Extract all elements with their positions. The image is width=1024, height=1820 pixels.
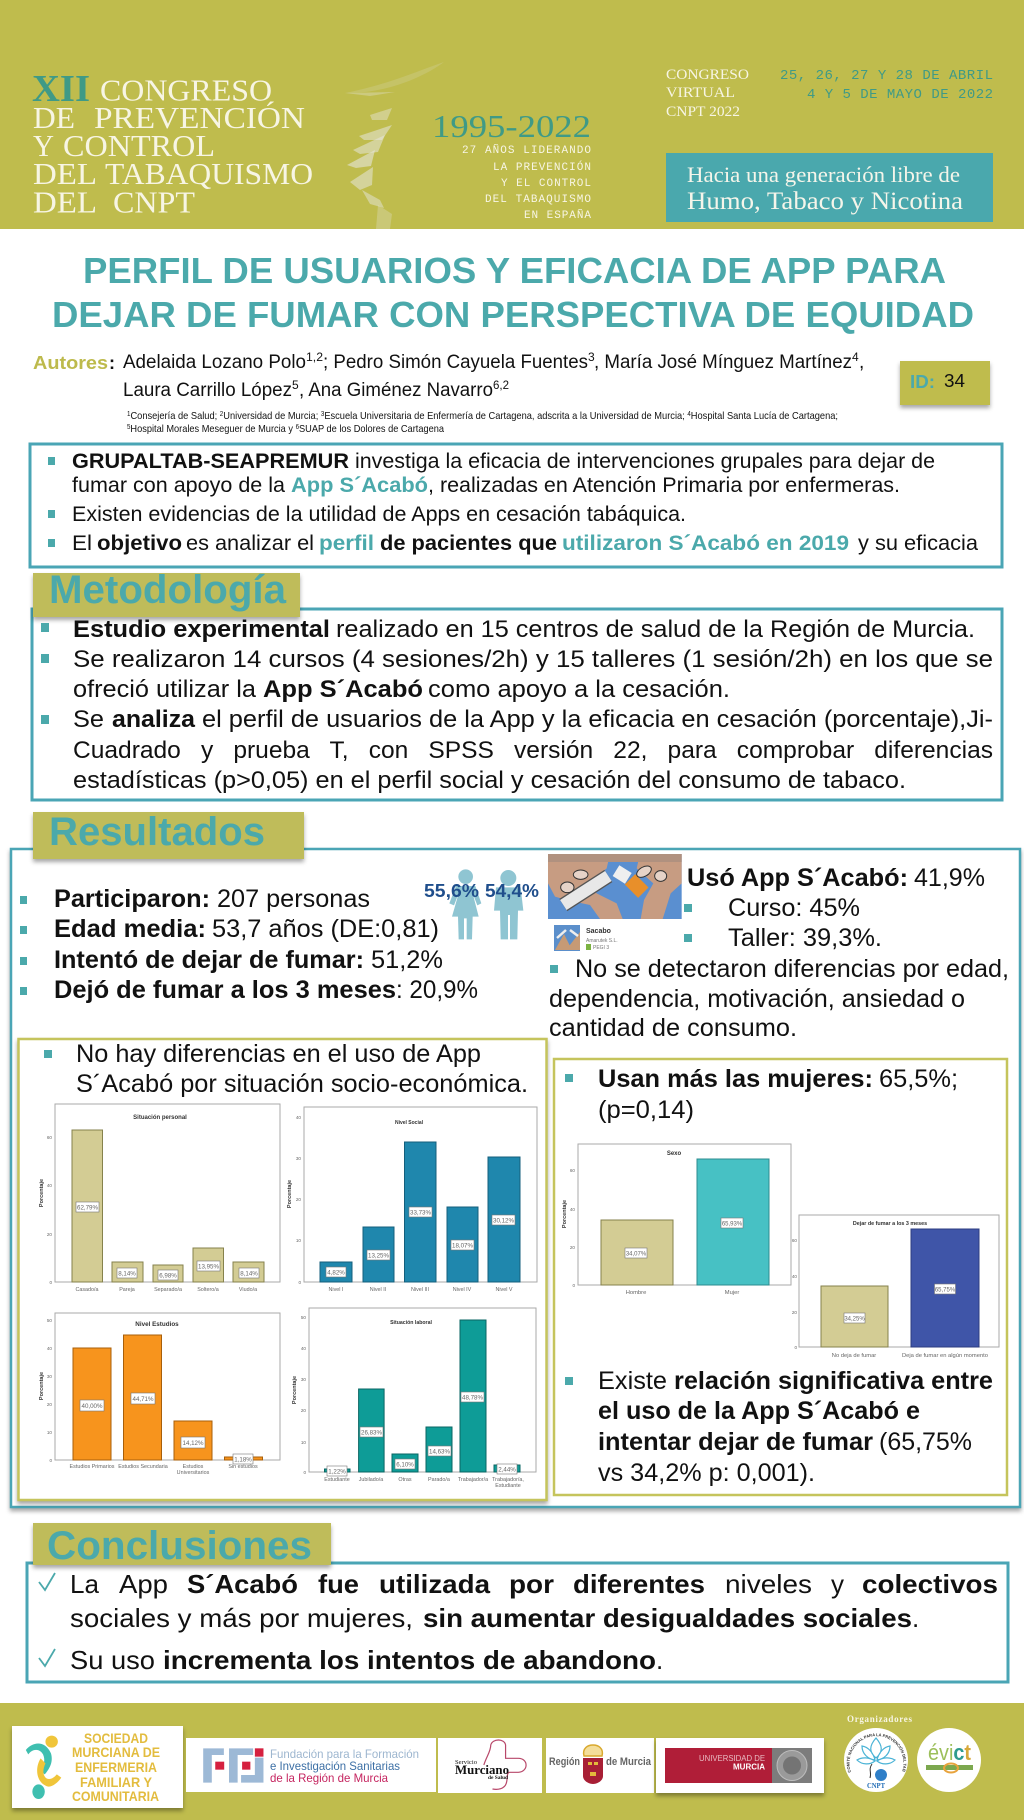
panel: introduction: Existen evidencias de la utilidad de Apps en cesación tabáquica.	[72, 503, 686, 526]
congress title: DEL	[33, 156, 97, 191]
values: situación personal: 62,79%	[77, 1204, 98, 1211]
values: situación laboral: 48,78%	[462, 1394, 483, 1401]
values: situación laboral: 2,44%	[498, 1466, 516, 1473]
affiliations: Hospital Morales Meseguer de Murcia y	[130, 423, 296, 435]
authors: Adelaida Lozano Polo	[123, 352, 306, 373]
chart: situación personal: Separado/a	[154, 1287, 182, 1293]
logo: CNPT: CNPT	[867, 1782, 885, 1790]
chart: situación personal: 60	[47, 1135, 52, 1140]
congress title: Y	[33, 128, 54, 163]
values: nivel social	[326, 1207, 515, 1277]
virtual congress label: CNPT 2022	[666, 104, 740, 120]
congress title: CONTROL	[63, 128, 215, 163]
values: nivel estudios: 44,71%	[132, 1396, 154, 1403]
heading: metodología: Metodología	[49, 568, 287, 612]
conclusion 2: .	[656, 1645, 663, 1675]
chart: nivel estudios: Estudios	[183, 1464, 204, 1470]
icon: woman and man with percentages: 54,4%	[485, 881, 539, 901]
methodology text: analiza	[112, 706, 196, 733]
conclusion 1: colectivos	[862, 1569, 998, 1599]
key results list: Dejó de fumar a los 3 meses	[54, 976, 396, 1004]
chart: dejar de fumar a los 3 meses: Dejar de fumar a los 3 meses	[853, 1221, 927, 1227]
chart: nivel estudios: 50	[47, 1318, 52, 1323]
conclusion 1: App	[119, 1569, 168, 1599]
app store listing: Sacabo	[586, 928, 611, 935]
icon: smoke	[345, 62, 444, 229]
app store listing: Amarutek S.L.	[586, 938, 618, 944]
values: nivel social: 18,07%	[452, 1242, 473, 1249]
chart: dejar de fumar a los 3 meses: 20	[792, 1310, 797, 1315]
chart: sexo: 0	[572, 1283, 575, 1288]
methodology text: realizado en 15 centros de salud de la Región de Murcia.	[336, 616, 975, 643]
panel: metodología	[32, 568, 1002, 800]
methodology text: Se realizaron 14 cursos (4 sesiones/2h) y 15 talleres (1 sesión/2h) en los que se	[73, 646, 993, 673]
congress title: CNPT	[113, 184, 195, 220]
affiliations	[127, 410, 838, 435]
slogan box: Hacia una generación libre de	[687, 162, 960, 187]
conclusion 1	[70, 1569, 998, 1633]
logo: región de murcia	[546, 1738, 654, 1793]
values: nivel social: 33,73%	[410, 1209, 431, 1216]
affiliations: SUAP de los Dolores de Cartagena	[299, 423, 444, 435]
chart: situación personal: Viudo/a	[239, 1287, 257, 1293]
socio-economic statement: S´Acabó por situación socio-económica.	[76, 1070, 528, 1098]
logo: sociedad murciana: SOCIEDAD	[84, 1730, 148, 1746]
anniversary text: LA PREVENCIÓN	[493, 160, 591, 174]
panel: introduction: App S´Acabó	[291, 474, 428, 497]
chart: situación laboral: Otras	[398, 1477, 412, 1483]
authors: 1,2	[306, 350, 323, 364]
socio-economic statement	[44, 1040, 528, 1098]
bars: sexo	[601, 1159, 769, 1285]
chart: sexo: Porcentaje	[562, 1200, 568, 1228]
app store listing	[554, 925, 618, 951]
values: situación laboral: 1,22%	[328, 1468, 346, 1475]
key results list: Participaron:	[54, 885, 210, 913]
title	[52, 250, 974, 335]
chart: nivel estudios: Nivel Estudios	[135, 1321, 179, 1328]
chart: nivel social	[287, 1107, 537, 1293]
chart: sexo: 60	[570, 1168, 575, 1173]
chart: situación laboral: 40	[301, 1346, 306, 1351]
chart: nivel estudios: 10	[47, 1430, 52, 1435]
anniversary text	[432, 108, 591, 222]
dates: 25, 26, 27 Y 28 DE ABRIL	[780, 68, 993, 84]
methodology text: Cuadrado y prueba T, con SPSS versión 22, para comprobar diferencias	[73, 737, 993, 764]
congress title: CONGRESO	[100, 72, 272, 108]
socio-economic statement: No hay diferencias en el uso de App	[76, 1040, 481, 1068]
chart: dejar de fumar a los 3 meses: 40	[792, 1274, 797, 1279]
values: nivel estudios: 14,12%	[182, 1440, 204, 1447]
virtual congress label	[666, 67, 749, 120]
panel: introduction: perfil	[319, 532, 374, 555]
chart: nivel social: 40	[296, 1115, 301, 1120]
panel: introduction: fumar con apoyo de la	[72, 474, 285, 497]
logo: FFIS: Fundación para la Formación	[270, 1747, 419, 1761]
affiliations: Consejería de Salud;	[130, 410, 220, 422]
values: sexo	[625, 1218, 743, 1258]
chart: situación personal: Casado/a	[75, 1287, 99, 1293]
significant relation statement: el uso de la App S´Acabó e	[598, 1397, 920, 1425]
chart: nivel social: 20	[296, 1197, 301, 1202]
chart: situación laboral: Estudiante	[495, 1483, 521, 1489]
authors: 5	[292, 378, 299, 392]
values: dejar de fumar	[844, 1284, 956, 1323]
panel: introduction: de pacientes que	[380, 532, 557, 555]
values: nivel estudios: 40,00%	[82, 1403, 103, 1410]
chart: sexo	[562, 1144, 791, 1296]
title: PERFIL DE USUARIOS Y EFICACIA DE APP PARA	[83, 250, 946, 291]
authors: Autores	[33, 353, 108, 373]
app use results: cantidad de consumo.	[549, 1014, 797, 1042]
chart: situación personal: 20	[47, 1232, 52, 1237]
chart: dejar de fumar a los 3 meses: Deja de fumar en algún momento	[902, 1353, 988, 1359]
conclusion 1: utilizada	[379, 1569, 491, 1599]
chart: nivel social: Nivel III	[411, 1287, 429, 1293]
conclusion 1: sin aumentar desigualdades sociales	[423, 1603, 912, 1633]
logo: evict	[917, 1728, 981, 1792]
chart: nivel estudios: Estudios Primarios	[70, 1464, 115, 1470]
logo: sociedad murciana: FAMILIAR Y	[80, 1774, 153, 1790]
panel: introduction: utilizaron S´Acabó en 2019	[562, 532, 849, 555]
chart: nivel social: Nivel I	[329, 1287, 343, 1293]
authors	[33, 350, 864, 401]
chart: nivel estudios: 0	[49, 1458, 52, 1463]
key results list: Intentó de dejar de fumar:	[54, 946, 364, 974]
logo: sociedad murciana: ENFERMERIA	[75, 1759, 157, 1775]
chart: dejar de fumar a los 3 meses	[792, 1215, 999, 1359]
conclusion 1: niveles	[725, 1569, 812, 1599]
affiliations: 3	[321, 411, 324, 418]
values: nivel social: 13,25%	[368, 1252, 389, 1259]
dates	[780, 68, 993, 103]
chart: dejar de fumar a los 3 meses: No deja de fumar	[832, 1353, 876, 1359]
affiliations: 5	[127, 424, 131, 431]
virtual congress label: CONGRESO	[666, 67, 749, 83]
affiliations: 2	[220, 411, 223, 418]
affiliations: Hospital Santa Lucía de Cartagena;	[691, 410, 838, 422]
title: DEJAR DE FUMAR CON PERSPECTIVA DE EQUIDAD	[52, 294, 974, 335]
bars: situación laboral	[324, 1320, 520, 1472]
authors: :	[109, 353, 115, 373]
values: nivel social: 30,12%	[493, 1217, 514, 1224]
chart: sexo: 20	[570, 1245, 575, 1250]
chart: dejar de fumar a los 3 meses: 0	[794, 1345, 797, 1350]
panel: conclusiones	[27, 1523, 1008, 1682]
chart: nivel estudios: Sin estudios	[228, 1464, 258, 1470]
ID badge: ID:	[910, 372, 935, 392]
icon: woman and man with percentages: 55,6%	[424, 881, 479, 901]
chart: nivel social: 30	[296, 1156, 301, 1161]
methodology text	[41, 616, 993, 794]
organizers label: Organizadores	[847, 1714, 912, 1724]
chart: situación personal: 40	[47, 1183, 52, 1188]
chart: nivel social: Nivel Social	[395, 1120, 424, 1126]
logo: universidad de murcia	[656, 1738, 824, 1793]
chart: situación laboral: Trabajador/a	[458, 1477, 488, 1483]
values: nivel social: 4,82%	[327, 1269, 345, 1276]
chart: situación laboral: 30	[301, 1377, 306, 1382]
logo: región de murcia: de Murcia	[606, 1756, 652, 1768]
values: nivel estudios	[80, 1393, 253, 1464]
bars: dejar de fumar	[821, 1229, 979, 1347]
values: dejar de fumar: 34,25%	[844, 1316, 865, 1322]
chart: situación laboral	[292, 1308, 536, 1489]
women statement: (p=0,14)	[598, 1096, 694, 1124]
logo: evict: évict	[928, 1740, 972, 1765]
app use results: Taller: 39,3%.	[728, 924, 882, 952]
logo: servicio murciano de salud: de Salud	[488, 1776, 508, 1781]
chart: situación laboral: Trabajador/a,	[492, 1477, 524, 1483]
methodology text: App S´Acabó	[263, 676, 423, 703]
significant relation statement: Existe	[598, 1367, 667, 1395]
panel: introduction: El	[72, 532, 92, 555]
significant relation statement: vs 34,2% p: 0,001).	[598, 1459, 815, 1487]
chart: situación personal: 0	[49, 1280, 52, 1285]
chart: nivel estudios: 30	[47, 1374, 52, 1379]
dates: 4 Y 5 DE MAYO DE 2022	[807, 87, 993, 103]
chart: situación laboral: 50	[301, 1315, 306, 1320]
chart: dejar de fumar a los 3 meses: 60	[792, 1238, 797, 1243]
bars: nivel estudios	[73, 1335, 262, 1460]
key results list: Edad media:	[54, 915, 206, 943]
chart: nivel social: Porcentaje	[287, 1180, 293, 1208]
conclusion 1: diferentes	[573, 1569, 705, 1599]
logo: sociedad murciana	[12, 1726, 183, 1808]
icon: check 1	[39, 1573, 55, 1590]
chart: situación laboral: Estudiante	[324, 1477, 350, 1483]
congress title: DEL	[33, 184, 97, 220]
chart: situación personal: Pareja	[119, 1287, 135, 1293]
chart: sexo: Mujer	[725, 1290, 739, 1296]
app use results	[549, 864, 1009, 1042]
values: situación personal: 6,98%	[159, 1272, 177, 1279]
methodology text: estadísticas (p>0,05) en el perfil social y cesación del consumo de tabaco.	[73, 767, 906, 794]
values: sexo: 65,93%	[722, 1221, 743, 1227]
congress title: DE	[33, 100, 75, 135]
chart: situación laboral: 0	[303, 1470, 306, 1475]
values: situación laboral: 6,10%	[396, 1461, 414, 1468]
methodology text: ofreció utilizar la	[73, 676, 257, 703]
values: nivel estudios: 1,18%	[234, 1456, 252, 1464]
values: situación personal	[76, 1202, 259, 1280]
methodology text: Se	[73, 706, 104, 733]
panel: introduction	[30, 444, 1002, 567]
panel: introduction: , realizadas en Atención Primaria por enfermeras.	[428, 474, 900, 497]
chart: nivel social: Nivel IV	[453, 1287, 472, 1293]
values: dejar de fumar: 65,75%	[935, 1287, 956, 1293]
anniversary text: Y EL CONTROL	[501, 178, 591, 190]
key results list: : 20,9%	[396, 976, 478, 1004]
chart: sexo: Sexo	[667, 1151, 682, 1157]
panel: resultados	[11, 810, 1020, 1507]
chart: nivel estudios: Porcentaje	[39, 1372, 45, 1400]
key results list: 51,2%	[371, 946, 443, 974]
key results list: 207 personas	[217, 885, 370, 913]
slogan box: Humo, Tabaco y Nicotina	[687, 188, 963, 215]
chart: nivel estudios: 20	[47, 1402, 52, 1407]
conclusion 1: y	[831, 1569, 844, 1599]
congress title: TABAQUISMO	[105, 156, 313, 191]
chart: sexo: 40	[570, 1207, 575, 1212]
affiliations: 1	[127, 411, 131, 418]
logo: FFIS: e Investigación Sanitarias	[270, 1759, 400, 1773]
slogan box	[666, 153, 993, 222]
panel: introduction: objetivo	[97, 532, 182, 555]
affiliations: 6	[296, 424, 299, 431]
women statement	[565, 1065, 958, 1124]
conclusion 2: Su uso	[70, 1645, 155, 1675]
conclusion 1: fue	[318, 1569, 359, 1599]
chart: nivel estudios	[39, 1313, 280, 1476]
chart: nivel social: 0	[298, 1280, 301, 1285]
logo: sociedad murciana: MURCIANA DE	[72, 1744, 160, 1760]
authors: 4	[852, 350, 859, 364]
authors: , María José Mínguez Martínez	[594, 352, 852, 373]
values: sexo: 34,07%	[626, 1251, 647, 1257]
chart: nivel estudios: 40	[47, 1346, 52, 1351]
app use results: No se detectaron diferencias por edad,	[575, 955, 1009, 983]
values: situación personal: 13,95%	[198, 1263, 219, 1270]
significant relation statement: relación significativa entre	[674, 1367, 993, 1395]
logo: FFIS: de la Región de Murcia	[270, 1771, 388, 1785]
chart: situación laboral: Jubilado/a	[359, 1477, 383, 1483]
chart: situación laboral: 10	[301, 1440, 306, 1445]
values: situación laboral	[327, 1392, 517, 1476]
chart: situación personal: Soltero/a	[197, 1287, 219, 1293]
panel: socio-economic	[18, 1039, 546, 1500]
authors: , Ana Giménez Navarro	[299, 380, 493, 401]
authors: ,	[859, 352, 864, 373]
conclusion 2: incrementa los intentos de abandono	[163, 1645, 656, 1675]
methodology text: como apoyo a la cesación.	[428, 676, 730, 703]
logo: universidad de murcia: UNIVERSIDAD DE	[699, 1754, 765, 1763]
icon: check 2	[39, 1649, 55, 1666]
chart: nivel estudios: Universitarios	[177, 1470, 210, 1476]
panel: introduction: y su eficacia	[858, 532, 978, 555]
anniversary text: 27 AÑOS LIDERANDO	[462, 144, 591, 157]
chart: situación laboral: Situación laboral	[390, 1320, 432, 1326]
logo: universidad de murcia: MURCIA	[733, 1762, 765, 1772]
heading: resultados: Resultados	[49, 810, 265, 854]
app store listing: PEGI 3	[593, 945, 609, 951]
congress title	[32, 68, 313, 220]
anniversary text: DEL TABAQUISMO	[485, 194, 591, 206]
conclusion 1: S´Acabó	[187, 1569, 298, 1599]
logo: servicio murciano de salud: Servicio	[455, 1760, 477, 1766]
logo: servicio murciano de salud: Murciano	[455, 1762, 509, 1777]
icon: app screenshot	[548, 854, 682, 919]
values: situación laboral: 26,83%	[361, 1429, 382, 1436]
chart: situación personal: Porcentaje	[39, 1179, 45, 1207]
chart: nivel social: 10	[296, 1238, 301, 1243]
chart: situación laboral: Porcentaje	[292, 1376, 298, 1404]
chart: nivel social: Nivel II	[370, 1287, 386, 1293]
affiliations: 4	[687, 411, 691, 418]
app use results: 41,9%	[914, 864, 985, 892]
bars: situación personal	[72, 1130, 264, 1282]
methodology text: Estudio experimental	[73, 616, 330, 643]
logo: sociedad murciana: COMUNITARIA	[72, 1788, 159, 1804]
key results list	[20, 885, 478, 1004]
logo: CNPT: COMITÉ NACIONAL PARA LA PREVENCIÓN DEL TABAQUISMO	[846, 1733, 906, 1772]
panel: introduction: es analizar el	[186, 532, 314, 555]
conclusion 1: La	[70, 1569, 100, 1599]
authors: 6,2	[493, 378, 509, 392]
conclusion 1: por	[509, 1569, 554, 1599]
authors: ; Pedro Simón Cayuela Fuentes	[323, 352, 588, 373]
chart: situación personal: Situación personal	[133, 1115, 187, 1121]
ID badge: 34	[944, 371, 965, 391]
women statement: 65,5%;	[879, 1065, 958, 1093]
affiliations: Universidad de Murcia;	[223, 410, 321, 422]
congress title: XII	[32, 68, 90, 110]
heading: conclusiones: Conclusiones	[47, 1524, 312, 1568]
logo: FFIS	[186, 1738, 436, 1792]
methodology text: el perfil de usuarios de la App y la eficacia en cesación (porcentaje),Ji-	[202, 706, 993, 733]
congress title: PREVENCIÓN	[94, 100, 305, 135]
conclusion 1: .	[912, 1603, 919, 1633]
significant relation statement: intentar dejar de fumar	[598, 1428, 873, 1456]
panel: introduction: GRUPALTAB-SEAPREMUR	[72, 450, 349, 473]
chart: nivel social: Nivel V	[495, 1287, 513, 1293]
anniversary text: 1995-2022	[432, 108, 591, 144]
logo: servicio murciano de salud	[438, 1738, 542, 1793]
panel: introduction: investiga la eficacia de intervenciones grupales para dejar de	[355, 450, 935, 473]
authors: 3	[588, 350, 595, 364]
values: situación personal: 8,14%	[118, 1270, 136, 1277]
significant relation statement	[565, 1367, 993, 1487]
header banner	[0, 0, 1024, 229]
chart: nivel estudios: Estudios Secundaria	[118, 1464, 168, 1470]
women statement: Usan más las mujeres:	[598, 1065, 873, 1093]
chart: sexo: Hombre	[626, 1290, 646, 1296]
conclusion 1: sociales y más por mujeres,	[70, 1603, 413, 1633]
key results list: 53,7 años (DE:0,81)	[212, 915, 439, 943]
anniversary text: EN ESPAÑA	[524, 209, 591, 222]
significant relation statement: (65,75%	[879, 1428, 972, 1456]
app use results: Curso: 45%	[728, 894, 860, 922]
icon: woman and man with percentages	[424, 869, 539, 939]
values: situación personal: 8,14%	[240, 1270, 258, 1277]
affiliations: Escuela Universitaria de Enfermería de Cartagena, adscrita a la Universidad de Murcia;	[324, 410, 687, 422]
chart: situación personal	[39, 1104, 280, 1293]
app use results: dependencia, motivación, ansiedad o	[549, 985, 965, 1013]
chart: situación laboral: 20	[301, 1408, 306, 1413]
panel: women and quitting	[554, 1059, 1007, 1495]
authors: Laura Carrillo López	[123, 380, 292, 401]
bars: nivel social	[320, 1142, 520, 1282]
chart: situación laboral: Parado/a	[428, 1477, 450, 1483]
logo: región de murcia: Región	[549, 1756, 580, 1768]
app use results: Usó App S´Acabó:	[687, 864, 908, 892]
values: situación laboral: 14,63%	[429, 1448, 450, 1455]
ID badge	[900, 361, 990, 405]
virtual congress label: VIRTUAL	[666, 85, 735, 101]
